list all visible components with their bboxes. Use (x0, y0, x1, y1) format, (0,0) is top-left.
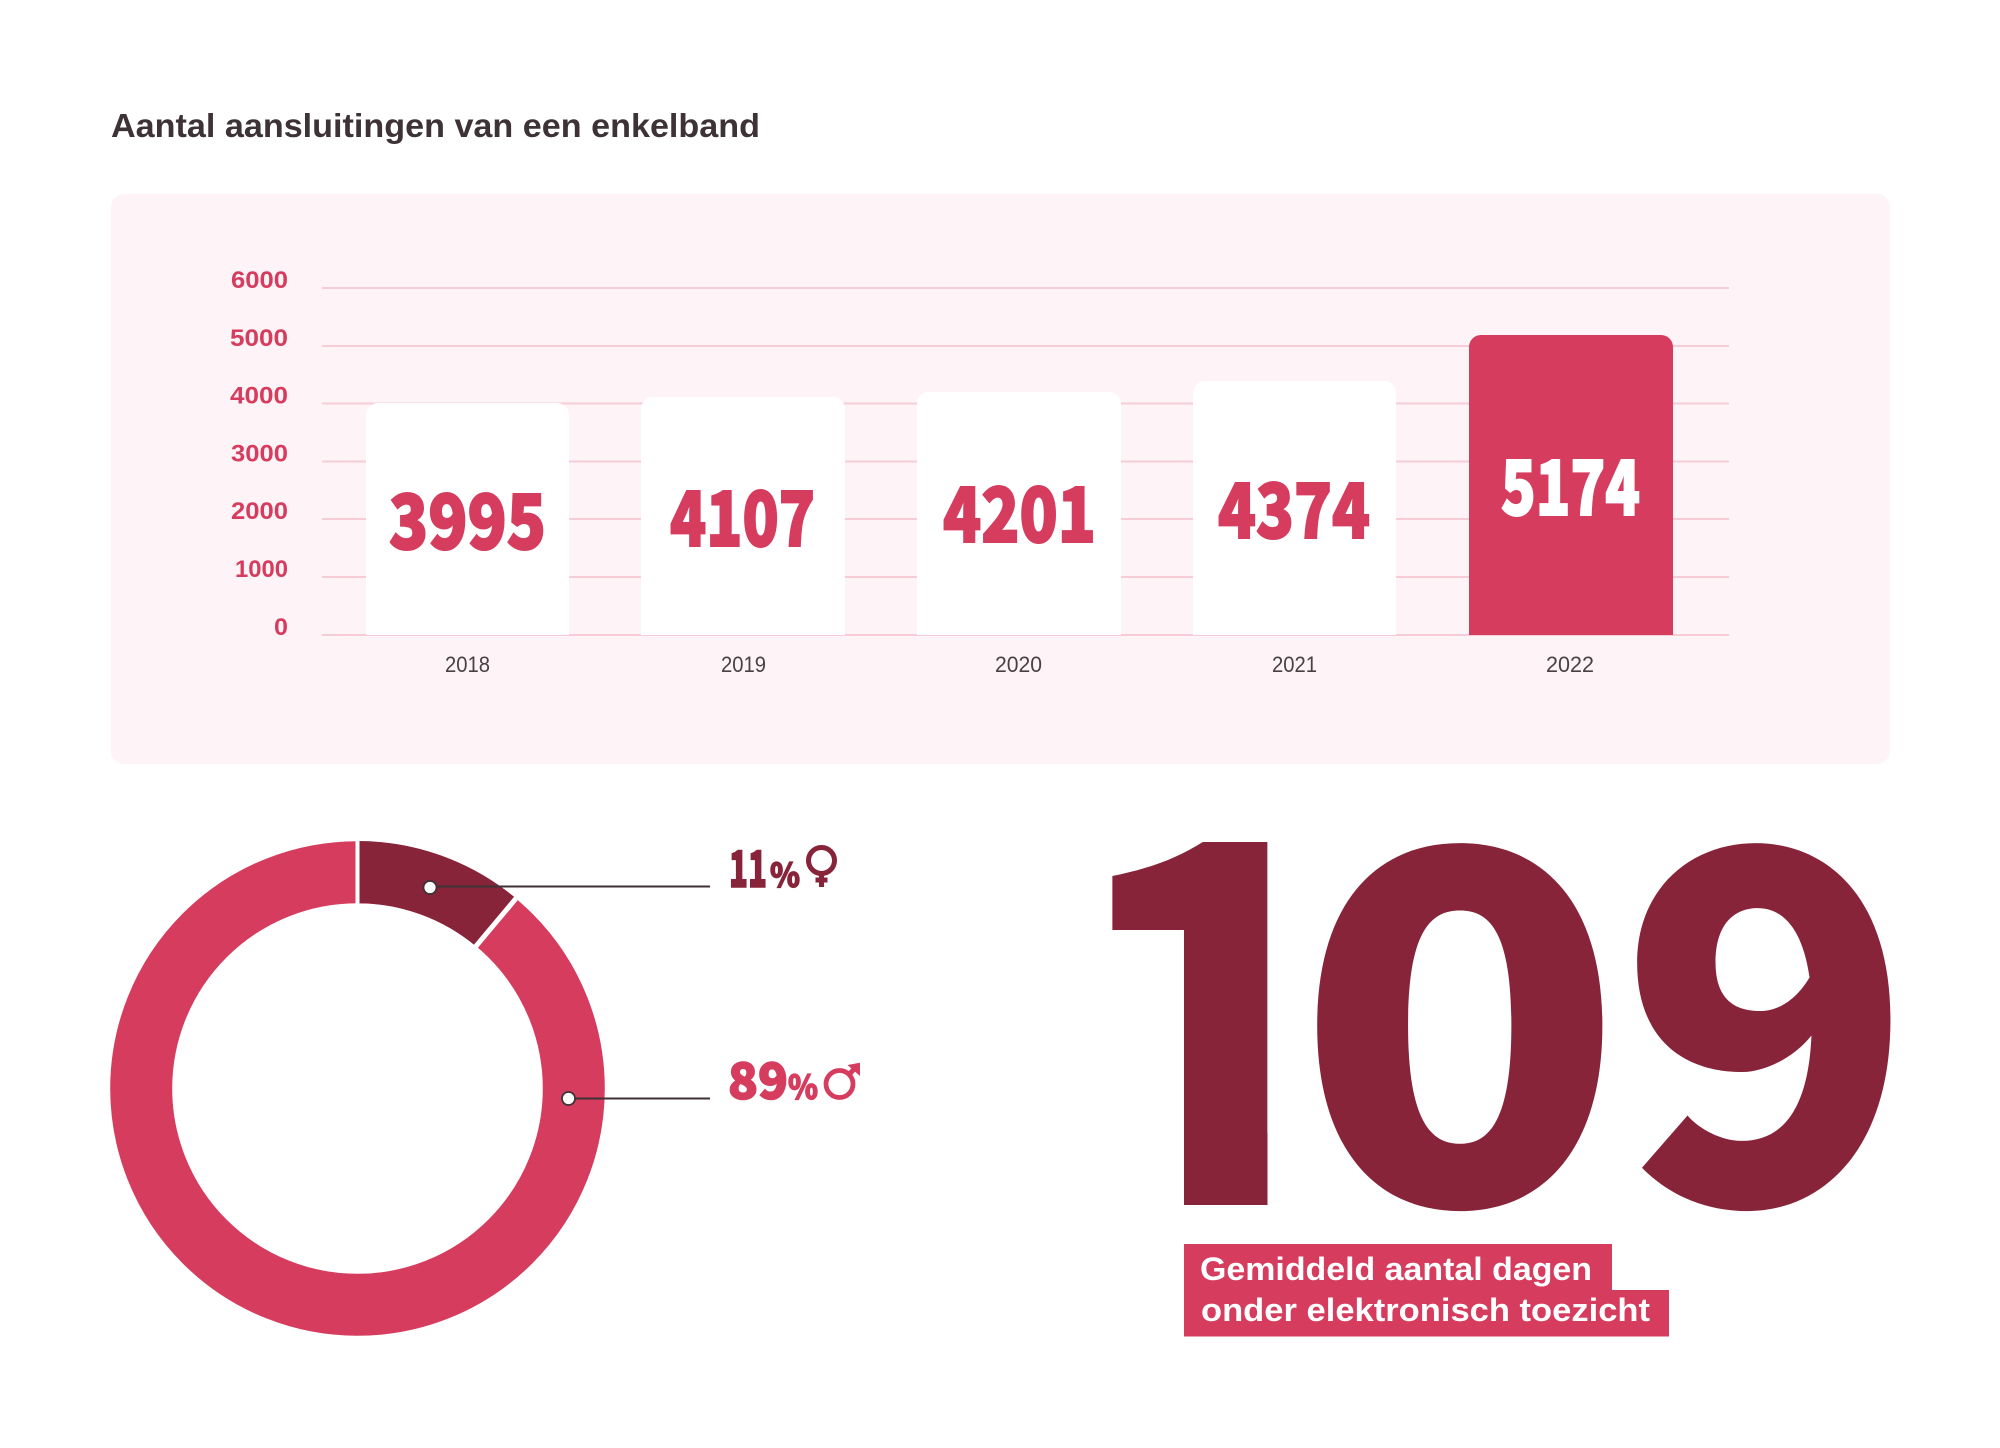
y axis labels: 6000 (231, 267, 288, 294)
y axis labels: 1000 (235, 556, 288, 583)
big number 109: 0 (1295, 638, 1624, 1345)
bar: 2022 (1469, 335, 1673, 677)
segment: 11% women (358, 841, 516, 946)
infographic canvas (110, 113, 1890, 1336)
callout: 11% women: 11 (729, 830, 767, 902)
y axis labels: 2000 (231, 498, 288, 525)
y axis labels: 3000 (231, 440, 288, 468)
bar: 2018 (366, 403, 569, 677)
callout: 89% men: % (788, 1061, 818, 1109)
bar: 2021 (1193, 381, 1396, 677)
bar: 2019: 4107 (670, 458, 815, 568)
bar: 2022: 5174 (1501, 427, 1640, 537)
caption: average days: onder elektronisch toezicht (1201, 1292, 1650, 1328)
bar: 2022: 2022 (1546, 652, 1594, 677)
bar: 2020: 4201 (943, 454, 1096, 564)
panel: bar chart (111, 194, 1890, 764)
callout: 89% men: 89 (728, 1042, 788, 1114)
donut chart (141, 838, 574, 1305)
big number 109: 9 (1619, 638, 1914, 1345)
callout: 11% women (424, 830, 834, 902)
bar: 2018: 3995 (389, 461, 546, 571)
bar: 2018: 2018 (445, 652, 490, 677)
icon: male symbol (826, 1063, 860, 1098)
bar: 2021: 2021 (1272, 652, 1317, 677)
caption: average days: Gemiddeld aantal dagen (1200, 1251, 1592, 1287)
title: Aantal aansluitingen van een enkelband (111, 108, 760, 145)
caption: average days (1184, 1244, 1669, 1336)
bar: 2021: 4374 (1218, 450, 1370, 560)
y axis labels: 0 (274, 614, 288, 641)
callout: 11% women: % (770, 849, 800, 897)
y axis labels (230, 267, 288, 641)
big number 109: 1 (1064, 626, 1363, 1350)
big number 109 (1112, 842, 1890, 1212)
callout: 89% men (562, 1042, 860, 1114)
bar: 2019: 2019 (721, 652, 766, 677)
bar: 2020 (917, 392, 1121, 677)
bar: 2020: 2020 (995, 652, 1042, 677)
icon: female symbol (808, 848, 834, 887)
y axis labels: 4000 (230, 382, 288, 410)
bar: 2019 (641, 397, 845, 677)
y axis labels: 5000 (230, 325, 288, 352)
